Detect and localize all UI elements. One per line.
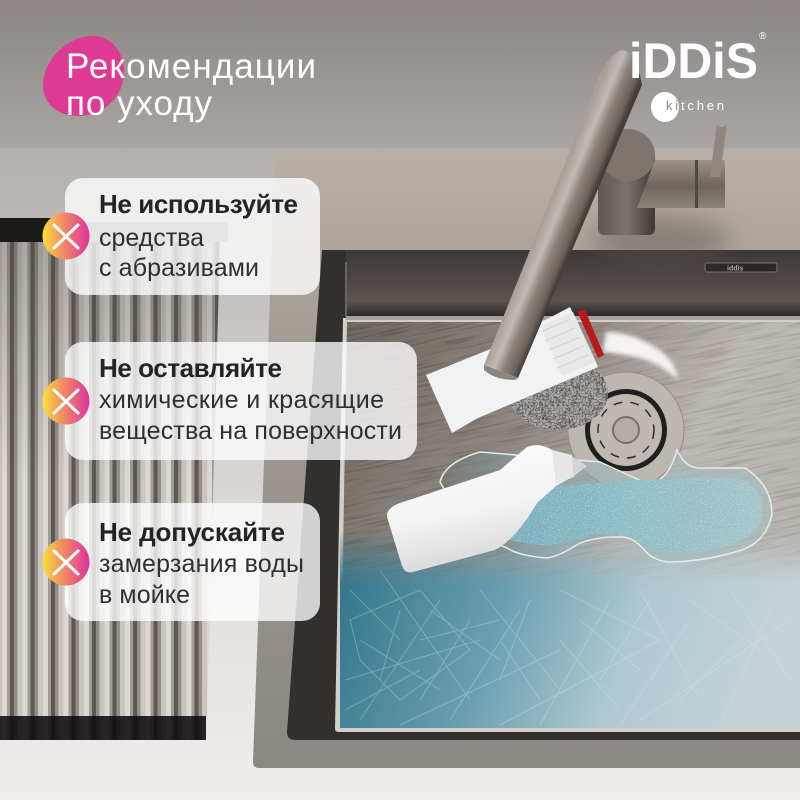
- faucet: [484, 50, 730, 380]
- cleaning powder container: [426, 307, 604, 433]
- heading: Не оставляйте: [99, 353, 282, 383]
- logo: ®: [759, 31, 767, 42]
- title: по уходу: [66, 84, 212, 123]
- sink plate: [253, 152, 800, 768]
- panel: no abrasives: [42, 178, 320, 295]
- text block: средства: [99, 224, 204, 252]
- logo: iDDiS: [629, 33, 758, 89]
- heading: Не используйте: [99, 189, 298, 219]
- title: Рекомендации: [66, 47, 316, 86]
- wall background: [0, 0, 800, 152]
- text block: замерзания воды: [99, 550, 304, 578]
- drain: [568, 372, 684, 488]
- frozen water in sink: [340, 530, 800, 728]
- icon: cross: [42, 378, 90, 424]
- steel wool scrubber: [510, 368, 608, 430]
- heading: Не допускайте: [99, 517, 285, 547]
- powder residue: [603, 332, 678, 380]
- logo: [629, 31, 767, 122]
- text block: химические и красящие: [99, 386, 384, 414]
- panel: no chemicals: вещества на поверхности: [99, 417, 402, 445]
- sink basin: iddis: [727, 266, 743, 272]
- pink accent blob: [43, 36, 124, 116]
- icon: cross: [42, 212, 90, 260]
- panel: no freezing: в мойке: [99, 581, 190, 609]
- panel: no chemicals: [42, 342, 417, 460]
- drying mat: [0, 218, 228, 740]
- puddle of water: [440, 450, 775, 565]
- panel: no freezing: [42, 503, 320, 621]
- panel: no abrasives: с абразивами: [99, 254, 259, 282]
- cleaning gel bottle: [387, 445, 587, 572]
- sink basin: [287, 250, 800, 740]
- logo: kitchen: [666, 98, 724, 113]
- title: [66, 47, 316, 123]
- icon: cross: [42, 538, 90, 586]
